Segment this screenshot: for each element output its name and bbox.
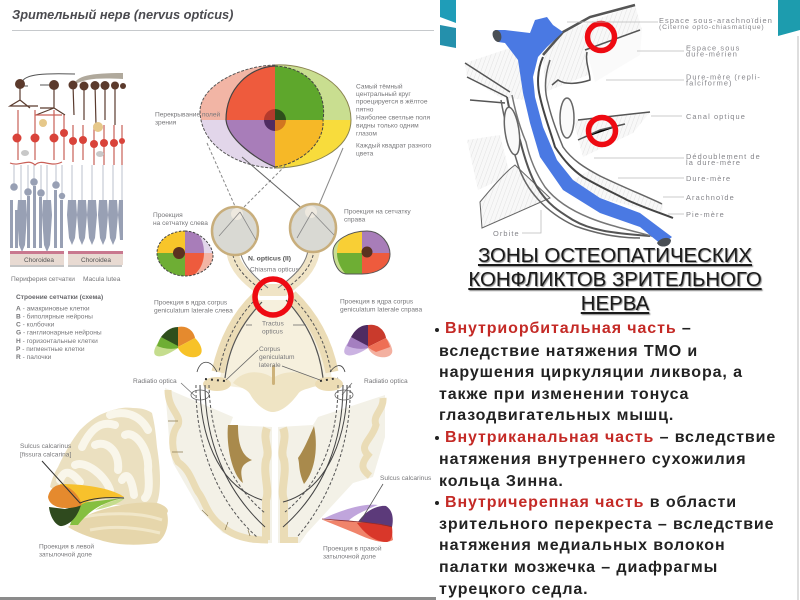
left retina projection — [155, 230, 215, 278]
visual field diagram — [200, 64, 352, 208]
geniculate projection labels: Tractus — [262, 320, 284, 328]
visual field labels: центральный круг — [356, 90, 411, 98]
retina structure diagram: Choroidea — [81, 257, 111, 264]
left occipital lobe: Проекция в левой — [39, 542, 94, 550]
right occipital lobe: затылочной доле — [323, 552, 376, 560]
retina legend: C - колбочки — [16, 320, 55, 328]
retina captions: Периферия сетчатки — [11, 276, 75, 283]
visual field labels: проецируется в жёлтое — [356, 98, 428, 106]
red ring: chiasm — [255, 279, 291, 315]
bullet: intracranial part: зрительного перекреста – вследствие — [439, 516, 774, 533]
retina captions: Macula lutea — [83, 276, 121, 283]
bullet: intraorbital part: Внутриорбитальная часть – — [445, 320, 692, 337]
bullet: intraorbital part: нарушения циркуляции ликвора, а — [439, 364, 743, 381]
retina captions — [11, 276, 121, 283]
heading: ЗОНЫ ОСТЕОПАТИЧЕСКИХ — [478, 245, 752, 267]
heading: НЕРВА — [581, 293, 649, 315]
anatomy labels: Orbite — [493, 229, 520, 238]
eye and nerve labels — [153, 208, 411, 274]
heading — [468, 245, 764, 316]
bullet: intracanal part: натяжения внутреннего сухожилия — [439, 451, 747, 468]
right retina projection — [332, 230, 390, 274]
radiatio optica labels: Radiatio optica — [364, 378, 408, 385]
left occipital lobe: Sulcus calcarinus — [20, 443, 72, 450]
geniculate projection labels: Проекция в ядра corpus — [154, 300, 228, 306]
right occipital lobe: Sulcus calcarinus — [380, 475, 432, 482]
bullet: intracanal part: Внутриканальная часть – вследствие — [445, 429, 776, 446]
retina legend: R - палочки — [16, 354, 52, 361]
visual field labels: Наиболее светлые поля — [356, 114, 430, 122]
anatomy labels: Espace sous-arachnoïdien — [659, 16, 773, 25]
eye and nerve labels: на сетчатку слева — [153, 220, 208, 227]
eye and nerve labels: справа — [344, 216, 366, 224]
left occipital lobe: затылочной доле — [39, 550, 92, 558]
retina legend: B - биполярные нейроны — [16, 312, 93, 320]
radiatio optica labels — [133, 378, 408, 396]
bullet: intraorbital part: также при изменении тонуса — [439, 386, 689, 403]
anatomy labels: Arachnoïde — [686, 193, 735, 202]
visual field labels: Каждый квадрат разного — [356, 142, 432, 150]
title: Зрительный нерв (nervus opticus) — [12, 7, 233, 22]
right cerebral section — [278, 385, 385, 543]
eye and nerve labels: Проекция на сетчатку — [344, 208, 411, 216]
optic nerve: blue — [495, 17, 672, 245]
heading: КОНФЛИКТОВ ЗРИТЕЛЬНОГО — [468, 269, 762, 291]
anatomy labels: Canal optique — [686, 112, 746, 121]
geniculate projection labels: laterale — [259, 362, 281, 369]
geniculate projection labels: geniculatum — [259, 354, 295, 361]
geniculate projection labels — [154, 298, 422, 380]
retina legend: Строение сетчатки (схема) — [16, 294, 103, 301]
left occipital lobe: [fissura calcarina] — [20, 452, 71, 458]
anatomy labels: Espace sous — [686, 44, 740, 52]
retina structure diagram: Choroidea — [24, 257, 54, 264]
visual field labels: глазом — [356, 130, 377, 138]
radiatio optica labels: Radiatio optica — [133, 378, 177, 385]
red ring: upper zone — [588, 24, 614, 50]
anatomy labels: dure-mérien — [686, 50, 738, 58]
anatomy labels: (Citerne opto-chiasmatique) — [659, 24, 764, 31]
eye and nerve labels: Chiasma opticus — [250, 266, 299, 274]
visual field labels: видны только одним — [356, 122, 419, 130]
geniculate projection labels: geniculatum laterale слева — [154, 308, 233, 314]
bullet: intraorbital part: вследствие натяжения ТМО и — [439, 343, 698, 360]
left cerebral section — [165, 385, 272, 543]
geniculate projection labels: geniculatum laterale справа — [340, 306, 422, 314]
geniculate projection labels: Проекция в ядра corpus — [340, 298, 414, 306]
eye and nerve labels: N. opticus (II) — [248, 256, 291, 262]
optic nerve ends — [493, 30, 671, 247]
bullet: intracranial part: турецкого седла. — [439, 581, 589, 598]
retina legend: A - амакриновые клетки — [16, 306, 90, 312]
visual field labels: цвета — [356, 150, 374, 158]
right occipital lobe: Проекция в правой — [323, 544, 382, 552]
left occipital lobe — [20, 408, 168, 558]
anatomy labels: falciforme) — [686, 78, 733, 88]
bullet: intraorbital part: глазодвигательных мышц. — [439, 407, 674, 424]
bullet: intracranial part — [435, 494, 774, 598]
anatomy labels: Dure-mère — [686, 174, 731, 183]
anatomy labels: Dédoublement de — [686, 152, 761, 161]
right geniculate map — [344, 325, 392, 357]
visual field labels: пятно — [356, 106, 374, 114]
bullet: intracranial part: Внутричерепная часть в области — [445, 494, 737, 511]
retina legend: G - ганглионарные нейроны — [16, 328, 102, 336]
bullet: intracranial part: натяжения медиальных волокон — [439, 537, 726, 554]
bullet: intracanal part — [435, 429, 776, 490]
retina legend — [16, 294, 103, 361]
anatomy labels: la dure-mère — [686, 158, 741, 167]
red ring: canal zone — [588, 118, 616, 144]
anatomy labels: Pie-mère — [686, 210, 725, 219]
geniculate projection labels: opticus — [262, 328, 284, 336]
eye and nerve labels: Проекция — [153, 212, 183, 219]
anatomy labels: Dure-mère (repli- — [686, 72, 761, 82]
visual field labels: Перекрывание полей — [155, 110, 221, 118]
visual field labels: зрения — [155, 120, 177, 126]
left geniculate map — [154, 327, 202, 357]
bullet: intracranial part: палатки мозжечка – диафрагмы — [439, 559, 718, 576]
visual field labels — [155, 82, 432, 158]
optic nerves and chiasm — [232, 250, 314, 290]
right eye — [290, 204, 336, 252]
bullet: intracanal part: кольца Зинна. — [439, 473, 564, 490]
anatomy labels — [493, 16, 773, 238]
left eye — [212, 207, 258, 255]
retina legend: P - пигментные клетки — [16, 346, 85, 353]
visual field labels: Самый тёмный — [356, 82, 403, 90]
optic canal anatomy diagram — [465, 5, 673, 247]
retina structure diagram — [10, 73, 126, 266]
brain stem and optic tracts — [197, 296, 345, 412]
geniculate projection labels: Corpus — [259, 346, 281, 353]
right occipital lobe — [322, 475, 432, 560]
retina legend: H - горизонтальные клетки — [16, 338, 98, 345]
bullet: intraorbital part — [435, 320, 743, 424]
